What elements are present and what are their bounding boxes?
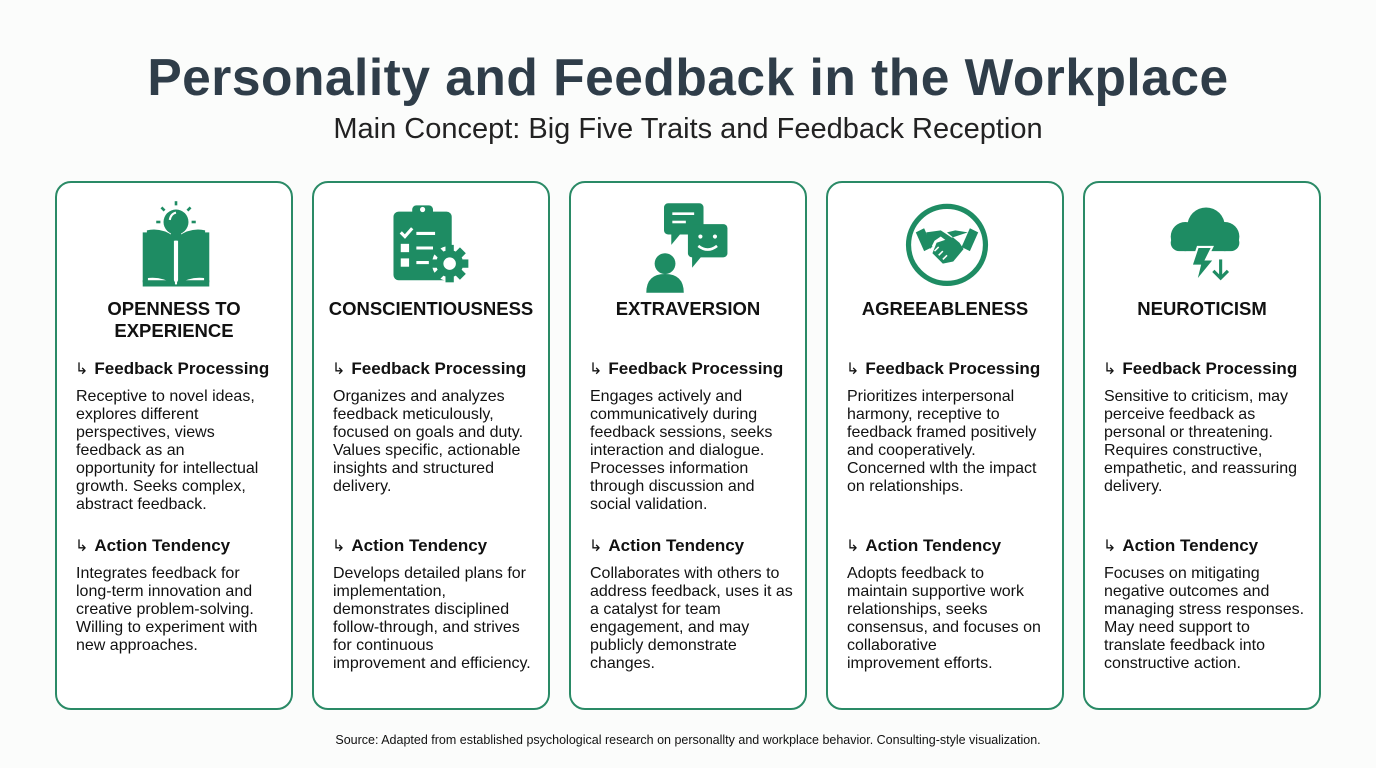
- text: action tendency: [76, 565, 257, 654]
- text: action tendency: negative outcomes and: [1104, 583, 1269, 600]
- subheading: feedback processing: ↳ Feedback Processing: [332, 359, 526, 378]
- text: feedback processing: Processes information: [590, 460, 748, 477]
- icon: book with lightbulb: [142, 201, 210, 286]
- text: feedback processing: through discussion and: [590, 478, 755, 495]
- text: feedback processing: personal or threatening.: [1104, 424, 1273, 441]
- text: feedback processing: Prioritizes interpersonal: [847, 388, 1014, 405]
- text: action tendency: a catalyst for team: [590, 601, 721, 618]
- source footnote: Source: Adapted from established psychological research on personallty and workplace behavior. Consulting-style visualization.: [335, 733, 1041, 747]
- text: action tendency: Collaborates with others to: [590, 565, 779, 582]
- text: feedback processing: opportunity for intellectual: [76, 460, 258, 477]
- text: action tendency: Focuses on mitigating: [1104, 565, 1260, 582]
- text: feedback processing: on relationships.: [847, 478, 964, 495]
- text: action tendency: relationships, seeks: [847, 601, 988, 618]
- text: feedback processing: delivery.: [1104, 478, 1162, 495]
- panel: neuroticism: [1083, 181, 1321, 710]
- subheading: feedback processing: ↳ Feedback Processing: [846, 359, 1040, 378]
- text: action tendency: [847, 565, 1041, 672]
- text: action tendency: follow-through, and strives: [333, 619, 520, 636]
- text: feedback processing: explores different: [76, 406, 198, 423]
- text: feedback processing: abstract feedback.: [76, 496, 207, 513]
- text: action tendency: constructive action.: [1104, 655, 1241, 672]
- heading: EXTRAVERSION: [616, 298, 760, 319]
- subheading: feedback processing: ↳ Feedback Processing: [589, 359, 783, 378]
- text: feedback processing: [76, 388, 258, 513]
- subheading: action tendency: ↳ Action Tendency: [75, 536, 230, 555]
- text: action tendency: [333, 565, 531, 672]
- text: action tendency: Willing to experiment with: [76, 619, 257, 636]
- text: feedback processing: Engages actively and: [590, 388, 742, 405]
- text: feedback processing: harmony, receptive to: [847, 406, 1000, 423]
- text: feedback processing: focused on goals and duty.: [333, 424, 523, 441]
- text: action tendency: for continuous: [333, 637, 434, 654]
- icon: clipboard with gear: [393, 205, 468, 282]
- panel: agreeableness: [826, 181, 1064, 710]
- text: feedback processing: [333, 388, 523, 495]
- text: action tendency: May need support to: [1104, 619, 1250, 636]
- icon: storm cloud with lightning: [1170, 208, 1240, 280]
- text: feedback processing: feedback sessions, seeks: [590, 424, 772, 441]
- text: action tendency: publicly demonstrate: [590, 637, 737, 654]
- subheading: feedback processing: ↳ Feedback Processing: [1103, 359, 1297, 378]
- text: action tendency: Integrates feedback for: [76, 565, 240, 582]
- text: feedback processing: [847, 388, 1036, 495]
- title: Personality and Feedback in the Workplace: [147, 48, 1229, 106]
- text: feedback processing: Sensitive to criticism, may: [1104, 388, 1288, 405]
- text: feedback processing: Concerned wlth the impact: [847, 460, 1036, 477]
- text: feedback processing: Organizes and analyzes: [333, 388, 505, 405]
- text: feedback processing: growth. Seeks complex,: [76, 478, 246, 495]
- text: feedback processing: feedback framed positively: [847, 424, 1036, 441]
- text: feedback processing: [1104, 388, 1297, 495]
- text: feedback processing: interaction and dialogue.: [590, 442, 764, 459]
- panel: conscientiousness: [312, 181, 550, 710]
- text: action tendency: [590, 565, 793, 672]
- text: feedback processing: feedback as an: [76, 442, 185, 459]
- subheading: action tendency: ↳ Action Tendency: [589, 536, 744, 555]
- text: action tendency: collaborative: [847, 637, 937, 654]
- text: feedback processing: social validation.: [590, 496, 707, 513]
- text: action tendency: consensus, and focuses on: [847, 619, 1041, 636]
- text: action tendency: maintain supportive work: [847, 583, 1024, 600]
- subheading: action tendency: ↳ Action Tendency: [1103, 536, 1258, 555]
- text: feedback processing: [590, 388, 772, 513]
- text: action tendency: creative problem-solving.: [76, 601, 254, 618]
- heading: [107, 298, 241, 341]
- text: action tendency: improvement and efficiency.: [333, 655, 531, 672]
- text: feedback processing: perspectives, views: [76, 424, 215, 441]
- text: action tendency: improvement efforts.: [847, 655, 993, 672]
- text: feedback processing: Receptive to novel ideas,: [76, 388, 255, 405]
- text: feedback processing: Requires constructive,: [1104, 442, 1262, 459]
- text: feedback processing: feedback meticulously,: [333, 406, 494, 423]
- subheading: feedback processing: ↳ Feedback Processing: [75, 359, 269, 378]
- subheading: action tendency: ↳ Action Tendency: [846, 536, 1001, 555]
- text: action tendency: long-term innovation and: [76, 583, 252, 600]
- icon: handshake in circle: [906, 204, 988, 286]
- text: feedback processing: communicatively during: [590, 406, 757, 423]
- text: action tendency: translate feedback into: [1104, 637, 1265, 654]
- text: action tendency: Develops detailed plans for: [333, 565, 526, 582]
- panel: openness: [55, 181, 293, 710]
- heading: NEUROTICISM: [1137, 298, 1267, 319]
- text: feedback processing: insights and structured: [333, 460, 494, 477]
- heading: OPENNESS TO: [107, 298, 241, 319]
- text: action tendency: managing stress responses.: [1104, 601, 1304, 618]
- text: feedback processing: perceive feedback as: [1104, 406, 1255, 423]
- text: feedback processing: and cooperatively.: [847, 442, 976, 459]
- subheading: action tendency: ↳ Action Tendency: [332, 536, 487, 555]
- text: action tendency: engagement, and may: [590, 619, 749, 636]
- text: action tendency: [1104, 565, 1304, 672]
- heading: AGREEABLENESS: [862, 298, 1028, 319]
- icon: person with chat bubbles: [646, 203, 728, 293]
- text: action tendency: new approaches.: [76, 637, 198, 654]
- text: action tendency: address feedback, uses it as: [590, 583, 793, 600]
- text: action tendency: Adopts feedback to: [847, 565, 984, 582]
- text: action tendency: demonstrates disciplined: [333, 601, 509, 618]
- panel: extraversion: [569, 181, 807, 710]
- heading: EXPERIENCE: [114, 320, 234, 341]
- subtitle: Main Concept: Big Five Traits and Feedback Reception: [333, 113, 1043, 145]
- text: action tendency: changes.: [590, 655, 655, 672]
- text: action tendency: implementation,: [333, 583, 446, 600]
- text: feedback processing: Values specific, actionable: [333, 442, 520, 459]
- text: feedback processing: delivery.: [333, 478, 391, 495]
- text: feedback processing: empathetic, and reassuring: [1104, 460, 1297, 477]
- heading: CONSCIENTIOUSNESS: [329, 298, 533, 319]
